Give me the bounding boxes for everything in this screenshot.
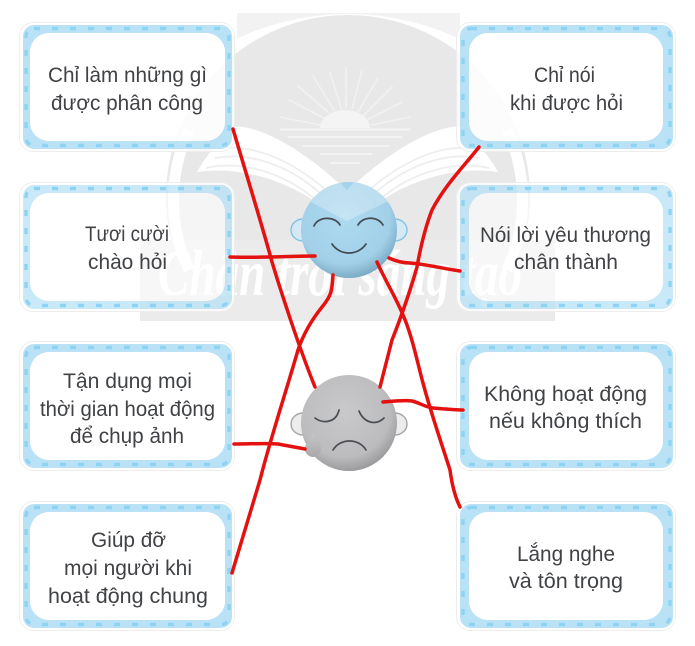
card: Tận dụng mọi thời gian hoạt động để chụp ảnh: Tận dụng mọi (63, 370, 192, 393)
card: Lắng nghe và tôn trọng: Lắng nghe (517, 543, 615, 566)
card: Tươi cười chào hỏi (20, 182, 234, 312)
card: Chỉ nói khi được hỏi: khi được hỏi (510, 92, 623, 115)
icon: sad grey face (291, 375, 407, 471)
card: Tận dụng mọi thời gian hoạt động để chụp ảnh: thời gian hoạt động (40, 398, 215, 421)
card: Chỉ làm những gì được phân công: được phân công (51, 92, 203, 115)
red line: Không hoạt động to sad face (383, 401, 463, 410)
card: Giúp đỡ mọi người khi hoạt động chung: hoạt động chung (48, 585, 208, 608)
card: Tận dụng mọi thời gian hoạt động để chụp ảnh: để chụp ảnh (70, 425, 184, 448)
card: Chỉ làm những gì được phân công: Chỉ làm những gì (48, 64, 207, 87)
card: Tận dụng mọi thời gian hoạt động để chụp ảnh (20, 342, 234, 470)
card: Chỉ nói khi được hỏi (456, 22, 676, 152)
card: Không hoạt động nếu không thích: Không hoạt động (484, 383, 647, 406)
watermark text: Chân trời sáng tạo (158, 237, 522, 310)
card: Tươi cười chào hỏi: Tươi cười (85, 223, 169, 246)
red line: Lắng nghe to happy face (377, 262, 460, 507)
red line: Tận dụng mọi to sad face (234, 444, 305, 449)
red line: Giúp đỡ to happy face (232, 275, 333, 573)
card: Không hoạt động nếu không thích: nếu không thích (489, 410, 642, 433)
card: Nói lời yêu thương chân thành: chân thành (514, 251, 618, 274)
card: Chỉ làm những gì được phân công (20, 22, 234, 152)
card: Lắng nghe và tôn trọng (456, 502, 676, 630)
card: Giúp đỡ mọi người khi hoạt động chung: mọi người khi (64, 557, 192, 580)
card: Giúp đỡ mọi người khi hoạt động chung (20, 502, 234, 630)
card: Lắng nghe và tôn trọng: và tôn trọng (509, 570, 623, 593)
red line: Chỉ làm những gì to sad face (233, 129, 315, 387)
card: Nói lời yêu thương chân thành (456, 182, 676, 312)
icon: happy blue face (291, 182, 407, 278)
red line: Nói lời yêu thương to happy face (389, 258, 460, 271)
red line: Tươi cười to happy face (230, 256, 315, 257)
card: Chỉ nói khi được hỏi: Chỉ nói (534, 64, 595, 87)
watermark: sun over open book logo (140, 13, 555, 321)
card: Giúp đỡ mọi người khi hoạt động chung: Giúp đỡ (91, 529, 166, 552)
card: Nói lời yêu thương chân thành: Nói lời yêu thương (480, 224, 651, 247)
card: Không hoạt động nếu không thích (456, 342, 676, 470)
red line: Chỉ nói to sad face (380, 147, 479, 387)
card: Tươi cười chào hỏi: chào hỏi (88, 251, 167, 274)
